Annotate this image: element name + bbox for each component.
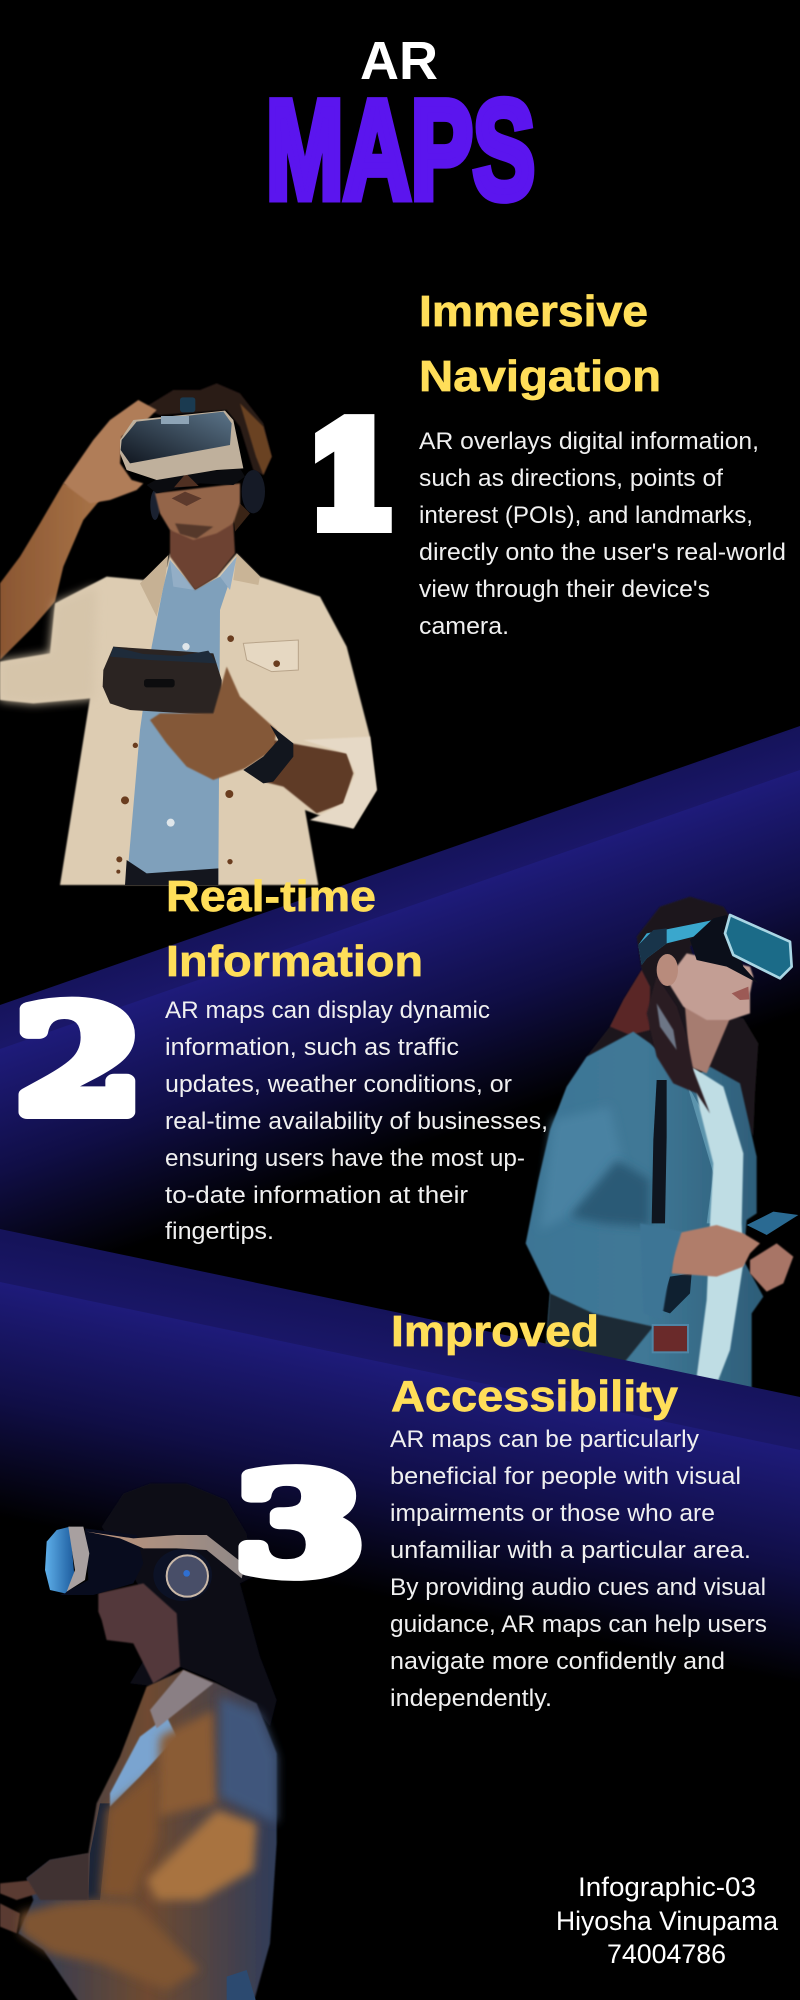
man: headset strap mount	[180, 397, 195, 412]
man: face	[155, 483, 240, 540]
man: neck	[170, 523, 235, 590]
man: held headset slot	[144, 679, 175, 687]
woman 2: black strap	[652, 1080, 667, 1223]
woman 3: upper sleeve cuff	[27, 1853, 88, 1900]
woman 3: collar	[150, 1670, 213, 1728]
photo: woman in metallic jacket	[0, 1483, 277, 2000]
woman 3: ear cup light	[183, 1570, 190, 1577]
woman 2: strap dark section	[638, 928, 667, 965]
heading: immersive navigation	[419, 287, 661, 401]
body text 3: beneficial for people with visual	[390, 1463, 741, 1490]
body text 1: AR overlays digital information,	[419, 428, 759, 455]
woman 2: hair strands	[647, 977, 710, 1113]
woman 3: strap	[87, 1532, 245, 1578]
woman 2: arm fold shadow	[570, 1160, 650, 1227]
lower diagonal navy band	[0, 1229, 800, 2000]
man: forearm	[263, 740, 353, 813]
woman 2: red hair light	[610, 970, 650, 1035]
man: jacket buttons	[116, 635, 280, 874]
body text 1: such as directions, points of	[419, 465, 723, 492]
number 2: 2	[15, 976, 143, 1147]
woman 3: ear cup face	[167, 1555, 208, 1597]
woman 3: right shoulder blue	[220, 1697, 277, 1823]
man: shirt collar	[170, 557, 237, 590]
woman 2: lower bag	[543, 1293, 653, 1380]
man: jacket collar right	[233, 553, 260, 585]
man: trousers	[125, 860, 218, 885]
number 1: 1	[308, 397, 396, 557]
heading: real-time information: Information	[166, 937, 423, 986]
body text 2: AR maps can display dynamic	[165, 997, 490, 1024]
body text 3: unfamiliar with a particular area.	[390, 1537, 751, 1564]
woman 3: chest blue light	[110, 1717, 177, 1807]
woman 3: visor frame	[67, 1527, 89, 1592]
body text 2: real-time availability of businesses,	[165, 1108, 548, 1135]
body text 3: guidance, AR maps can help users	[390, 1611, 767, 1638]
woman 2: jacket front edge	[687, 1083, 723, 1223]
title: AR: AR	[360, 31, 438, 91]
body text 3	[390, 1426, 767, 1712]
section 3	[235, 1307, 767, 1712]
footer credits: Infographic-03	[578, 1872, 756, 1902]
body text 3: impairments or those who are	[390, 1500, 715, 1527]
woman 2: pocket patch	[653, 1325, 688, 1352]
body text 2: ensuring users have the most up-	[165, 1145, 525, 1172]
woman 3: torso brown	[100, 1770, 157, 1897]
woman 2: right hand	[750, 1243, 793, 1292]
section 1	[308, 287, 786, 640]
body text 3: independently.	[390, 1685, 552, 1712]
body text 2: fingertips.	[165, 1218, 274, 1245]
title	[266, 31, 535, 228]
man: held headset	[103, 647, 222, 715]
number 3: 3	[235, 1445, 364, 1605]
body text 1: view through their device's	[419, 576, 710, 603]
body text 3: navigate more confidently and	[390, 1648, 725, 1675]
woman 3: hands	[0, 1880, 38, 1933]
body text 2: to-date information at their	[165, 1182, 468, 1209]
body text 2: updates, weather conditions, or	[165, 1071, 512, 1098]
woman 2: hair	[587, 897, 758, 1137]
woman 2: sleeve highlight	[540, 1107, 623, 1230]
heading: immersive navigation: Navigation	[419, 352, 661, 401]
footer credits	[556, 1872, 779, 1969]
man: watch	[243, 725, 293, 783]
man: raised arm	[0, 483, 100, 660]
photo: woman in denim jacket	[526, 897, 798, 1413]
woman 2: lips	[732, 987, 749, 1000]
woman 2: grey hair highlight	[657, 1003, 677, 1050]
body text 3: By providing audio cues and visual	[390, 1574, 766, 1601]
man: hair edge	[240, 403, 272, 475]
woman 3: hair	[102, 1483, 277, 1727]
woman 2: neck	[683, 987, 730, 1073]
man: mouth	[172, 492, 202, 506]
woman 3: visor	[45, 1527, 75, 1593]
man: held headset top edge	[110, 647, 217, 663]
heading: improved accessibility: Improved	[391, 1307, 599, 1356]
woman 2: face	[667, 953, 753, 1020]
body text 1	[419, 428, 786, 640]
body text 1: directly onto the user's real-world	[419, 539, 786, 566]
man: rolled sleeve cuff	[303, 737, 377, 828]
woman 2: visor	[725, 915, 792, 978]
man: raised hand	[63, 400, 157, 503]
man: right pocket flap	[243, 640, 298, 672]
woman 2: jacket	[526, 1032, 763, 1413]
woman 3: jacket	[18, 1670, 277, 2000]
man: hair	[143, 383, 272, 475]
man: hand	[150, 667, 277, 780]
heading: improved accessibility	[391, 1307, 679, 1421]
body text 2: information, such as traffic	[165, 1034, 459, 1061]
woman 2: left hand	[672, 1225, 760, 1277]
man: headset shell	[120, 411, 243, 480]
man: shirt buttons	[167, 643, 190, 827]
man: jacket collar left	[140, 555, 168, 617]
woman 3: ear cup	[153, 1549, 212, 1601]
heading: improved accessibility: Accessibility	[391, 1372, 679, 1421]
woman 3: forearm	[20, 1900, 200, 1990]
footer credits: Hiyosha Vinupama	[556, 1906, 779, 1936]
footer credits: 74004786	[607, 1939, 726, 1969]
man: nose	[174, 473, 199, 487]
body text 2	[165, 997, 548, 1245]
woman 3: skirt	[227, 1970, 257, 2000]
woman 2: sleeve cuff	[640, 1223, 682, 1320]
body text 1: camera.	[419, 613, 509, 640]
man: shirt	[127, 557, 237, 883]
photo: man with VR headset	[0, 383, 377, 885]
woman 2: phone	[747, 1212, 798, 1235]
woman 3: front dark placket	[88, 1803, 110, 1900]
body text 1: interest (POIs), and landmarks,	[419, 502, 753, 529]
upper diagonal navy band	[0, 726, 800, 1400]
man: headphone left	[150, 490, 160, 520]
woman 3: sleeve light	[147, 1810, 257, 1900]
woman 2: headset body	[690, 915, 758, 983]
heading: real-time information	[166, 872, 423, 986]
man: eye strap	[147, 468, 245, 493]
heading: real-time information: Real-time	[166, 872, 376, 921]
woman 2: cyan strap	[638, 920, 714, 965]
woman 3: chest brown light	[157, 1710, 217, 1817]
man: lower hair	[233, 503, 250, 532]
woman 2: ear	[657, 954, 678, 986]
man: headphone right	[242, 470, 265, 513]
woman 2: white top	[692, 1067, 743, 1380]
man: headset top button	[161, 416, 189, 424]
heading: immersive navigation: Immersive	[419, 287, 648, 336]
woman 2: shadow under sleeve	[660, 1273, 692, 1313]
woman 3: face	[98, 1583, 180, 1683]
title: MAPS: MAPS	[266, 71, 535, 228]
woman 3: headset body	[60, 1528, 143, 1595]
section 2	[15, 872, 548, 1245]
man: jacket	[0, 553, 377, 885]
man: left sleeve shading	[0, 587, 97, 703]
man: headset visor	[121, 412, 232, 463]
body text 3: AR maps can be particularly	[390, 1426, 699, 1453]
man: chin shadow	[175, 523, 213, 539]
